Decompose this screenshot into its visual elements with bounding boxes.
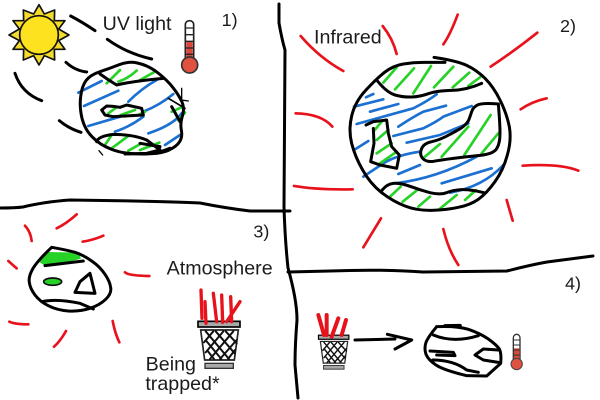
panel 1: UV light warms earth <box>9 5 238 155</box>
label: step 4: 4) <box>565 273 581 293</box>
label: step 3: 3) <box>253 222 269 242</box>
label: UV light: UV light <box>103 13 172 35</box>
earth barren <box>425 326 501 376</box>
infrared rays <box>294 15 578 265</box>
icon: waste bin with trapped heat <box>198 290 240 368</box>
label: Infrared: Infrared <box>314 26 382 48</box>
icon: small waste bin <box>318 315 349 369</box>
icon: thermometer medium <box>182 21 198 73</box>
panel 3: atmosphere traps heat <box>8 214 273 395</box>
panel 4: earth warms <box>318 273 581 376</box>
icon: sun <box>9 5 69 65</box>
panel 2: earth emits infrared <box>294 15 578 265</box>
label: step 1: 1) <box>222 10 238 30</box>
UV light rays <box>15 16 152 155</box>
label: Atmosphere: Atmosphere <box>167 257 273 279</box>
label: Being trapped: Being <box>146 354 196 376</box>
icon: thermometer hot <box>511 334 522 370</box>
label: Being trapped: trapped* <box>145 373 220 395</box>
label: step 2: 2) <box>560 16 576 36</box>
arrow <box>355 334 412 349</box>
large earth <box>350 57 510 210</box>
red heat rays <box>8 214 149 347</box>
earth with little green <box>29 247 111 311</box>
earth small <box>78 62 188 154</box>
